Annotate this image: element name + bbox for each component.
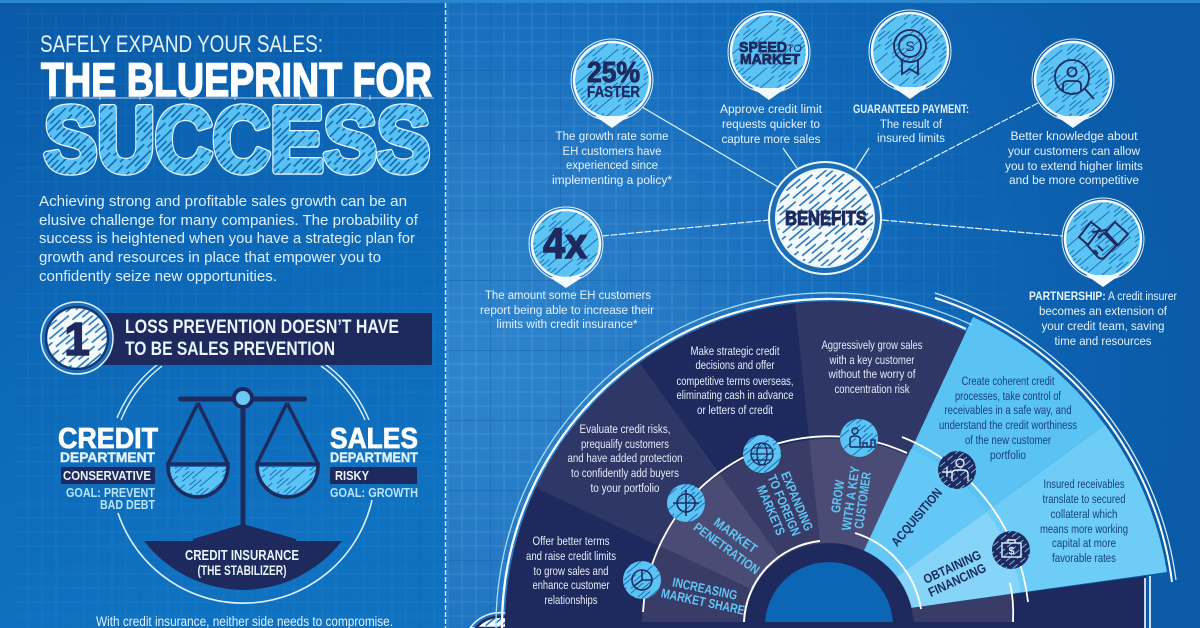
intro paragraph [39, 193, 419, 285]
sector text: increasing market share: Offer better terms [532, 534, 610, 548]
intro paragraph: growth and resources in place that empower you to [39, 249, 381, 266]
label: market penetration: PENETRATION [691, 519, 763, 577]
label: grow with a key customer: CUSTOMER [851, 471, 874, 530]
sector text: increasing market share: relationships [544, 593, 598, 607]
sector text: market penetration: and have added protection [568, 451, 683, 465]
panel: growth fan [496, 293, 1176, 628]
title: success: SUCCESS [44, 89, 430, 191]
sector text: obtaining financing: translate to secured [1042, 492, 1126, 506]
sales department text: RISKY [335, 468, 369, 483]
sector text: acquisition: portfolio [990, 448, 1026, 462]
background: left panel [0, 0, 446, 628]
icon: handshake [1079, 222, 1128, 259]
benefit: partnership [1029, 198, 1177, 348]
benefit: guaranteed payment: insured limits [877, 131, 945, 145]
label: increasing market share: MARKET SHARE [660, 585, 746, 618]
benefit: 25% faster: EH customers have [562, 144, 662, 158]
panel: section 1 balance [41, 302, 432, 628]
label: grow with a key customer: WITH A KEY [839, 465, 863, 532]
benefit: 25% faster: The growth rate some [556, 129, 669, 143]
label: obtaining financing: FINANCING [926, 560, 988, 600]
benefit: partnership: your credit team, saving [1042, 319, 1165, 333]
base: credit insurance [144, 524, 342, 590]
circle frame around scale [117, 364, 372, 603]
sales department text: GOAL: GROWTH [330, 486, 418, 500]
sector text: grow with a key customer [822, 338, 922, 396]
intro paragraph: confidently seize new opportunities. [39, 268, 277, 285]
benefit: partnership: becomes an extension of [1039, 304, 1168, 318]
sector text: obtaining financing: means more working [1040, 522, 1128, 536]
benefit: speed to market: TO [787, 43, 802, 55]
benefit: partnership: PARTNERSHIP: A credit insurer [1029, 289, 1177, 303]
benefit: 25% faster [552, 39, 672, 187]
sector text: acquisition [939, 374, 1077, 462]
sector text: obtaining financing: capital at more [1052, 536, 1116, 550]
benefit: guaranteed payment [853, 10, 969, 145]
label: increasing market share [660, 574, 746, 618]
number badge [41, 302, 113, 374]
icon: person search [1055, 60, 1094, 99]
sector text: acquisition: understand the credit worthiness [939, 418, 1077, 432]
icon: acquisition person [938, 451, 976, 489]
sector text: increasing market share: and raise credit limits [526, 549, 616, 563]
title: the blueprint for: THE BLUEPRINT FOR [41, 53, 432, 106]
intro paragraph: Achieving strong and profitable sales growth can be an [39, 193, 407, 210]
sector text: expanding to foreign markets: Make strategic credit [690, 344, 780, 358]
number badge: 1 [64, 313, 90, 365]
icon: customer chart [840, 419, 878, 457]
sector text: acquisition: of the new customer [965, 433, 1051, 447]
sector text: expanding to foreign markets: eliminating cash in advance [676, 388, 794, 402]
label: expanding to foreign markets [754, 469, 816, 538]
sector text: obtaining financing: Insured receivables [1044, 477, 1124, 491]
fan sectors [536, 363, 829, 626]
benefit: partnership: time and resources [1054, 334, 1152, 348]
sector text: increasing market share [526, 534, 616, 607]
benefit: speed to market: requests quicker to [722, 117, 820, 131]
benefit: 25% faster: implementing a policy* [552, 173, 672, 187]
sector text: market penetration [568, 422, 683, 495]
benefit: customer knowledge [1005, 39, 1143, 187]
label: expanding to foreign markets: TO FOREIGN [765, 472, 804, 538]
fan arcs [496, 293, 1176, 628]
credit department text [58, 423, 158, 512]
intro paragraph: elusive challenge for many companies. The probability of [39, 212, 419, 229]
icon: financing briefcase [992, 531, 1030, 569]
sector text: expanding to foreign markets: competitive terms overseas, [676, 374, 794, 388]
sales department text: SALES [330, 423, 418, 455]
icon: benefits hub [769, 162, 881, 274]
benefit: speed to market: SPEED [739, 39, 787, 56]
icon: target [667, 484, 705, 522]
credit department text: CONSERVATIVE [63, 468, 151, 483]
sector text: obtaining financing: collateral which [1050, 507, 1118, 521]
label: market penetration: MARKET [711, 515, 760, 556]
icon: financing briefcase: $ [1008, 546, 1015, 558]
credit department text: GOAL: PREVENT [66, 486, 155, 500]
benefit: customer knowledge: you to extend higher limits [1005, 159, 1143, 173]
sector text: expanding to foreign markets [676, 344, 794, 417]
credit department text: BAD DEBT [100, 498, 155, 512]
background: right panel [446, 0, 1200, 628]
sector text: increasing market share: enhance customer [532, 578, 610, 592]
heading text [125, 317, 399, 360]
title: success: SUCCESS [44, 89, 430, 191]
label: obtaining financing [921, 547, 988, 600]
benefit: 4x: The amount some EH customers [485, 288, 651, 302]
benefit: speed to market: capture more sales [722, 132, 820, 146]
label: expanding to foreign markets: MARKETS [754, 483, 789, 538]
fan base [505, 302, 1146, 628]
title: overline: SAFELY EXPAND YOUR SALES: [40, 31, 323, 58]
benefit: 4x: report being able to increase their [480, 303, 654, 317]
heading text: LOSS PREVENTION DOESN’T HAVE [125, 317, 399, 338]
inner band sectors [642, 546, 829, 626]
label: grow with a key customer: GROW [828, 478, 847, 514]
sector text: obtaining financing [1040, 477, 1128, 565]
sector text: grow with a key customer: concentration risk [834, 382, 910, 396]
benefit: 25% faster: FASTER [587, 84, 640, 101]
icon: benefits hub: BENEFITS [785, 208, 867, 230]
benefit: guaranteed payment: The result of [880, 117, 943, 131]
light sectors [829, 317, 1105, 626]
sector text: grow with a key customer: with a key customer [829, 353, 914, 367]
benefit: 25% faster: 25% [587, 57, 640, 89]
benefit: speed to market [720, 11, 823, 146]
benefit: speed to market: MARKET [740, 51, 800, 68]
label: acquisition: ACQUISITION [888, 485, 945, 549]
icon: scale [168, 387, 318, 527]
credit department text: CREDIT [58, 423, 158, 455]
intro paragraph: success is heightened when you have a strategic plan for [39, 230, 415, 247]
center dome [744, 543, 914, 628]
sector text: increasing market share: to grow sales and [534, 564, 609, 578]
credit department text: DEPARTMENT [60, 449, 155, 465]
sector text: market penetration: to your portfolio [590, 481, 660, 495]
section heading band [100, 313, 432, 365]
icon: globe [743, 435, 781, 473]
section 2 badge (partial) [470, 613, 530, 628]
sector text: grow with a key customer: Aggressively grow sales [822, 338, 922, 352]
icon: rosette: S [905, 38, 915, 54]
benefit: customer knowledge: your customers can allow [1008, 144, 1140, 158]
base: credit insurance: (THE STABILIZER) [198, 563, 286, 578]
sales department text [330, 423, 418, 500]
label: obtaining financing: OBTAINING [921, 547, 983, 587]
label: increasing market share: INCREASING [671, 574, 739, 603]
benefit: 4x [480, 207, 654, 331]
sector text: acquisition: processes, take control of [955, 389, 1061, 403]
label: grow with a key customer [828, 465, 874, 532]
benefit: 25% faster: experienced since [566, 158, 658, 172]
benefit: customer knowledge: and be more competitive [1009, 173, 1139, 187]
heading text: TO BE SALES PREVENTION [125, 339, 335, 360]
base: credit insurance: CREDIT INSURANCE [185, 547, 299, 564]
sector text: obtaining financing: favorable rates [1052, 551, 1116, 565]
sector text: market penetration: Evaluate credit risks, [580, 422, 670, 436]
title block [40, 31, 434, 191]
sector text: expanding to foreign markets: decisions and offer [696, 358, 774, 372]
icon: market share pie [623, 561, 661, 599]
label: expanding to foreign markets: EXPANDING [778, 469, 816, 533]
sales department text: DEPARTMENT [330, 449, 418, 465]
benefit: speed to market: Approve credit limit [720, 102, 823, 116]
benefit: guaranteed payment: GUARANTEED PAYMENT: [853, 102, 969, 116]
benefit: 4x: limits with credit insurance* [496, 317, 638, 331]
connector lines [602, 103, 1063, 236]
sector text: acquisition: Create coherent credit [962, 374, 1055, 388]
sector text: market penetration: prequalify customers [581, 437, 669, 451]
benefit: customer knowledge: Better knowledge about [1010, 129, 1138, 143]
sector text: market penetration: to confidently add buyers [571, 466, 679, 480]
benefit: 4x: 4x [543, 220, 587, 268]
sector text: grow with a key customer: without the worry of [828, 367, 916, 381]
sector text: acquisition: receivables in a safe way, and [944, 403, 1072, 417]
sector text: expanding to foreign markets: or letters of credit [697, 403, 773, 417]
